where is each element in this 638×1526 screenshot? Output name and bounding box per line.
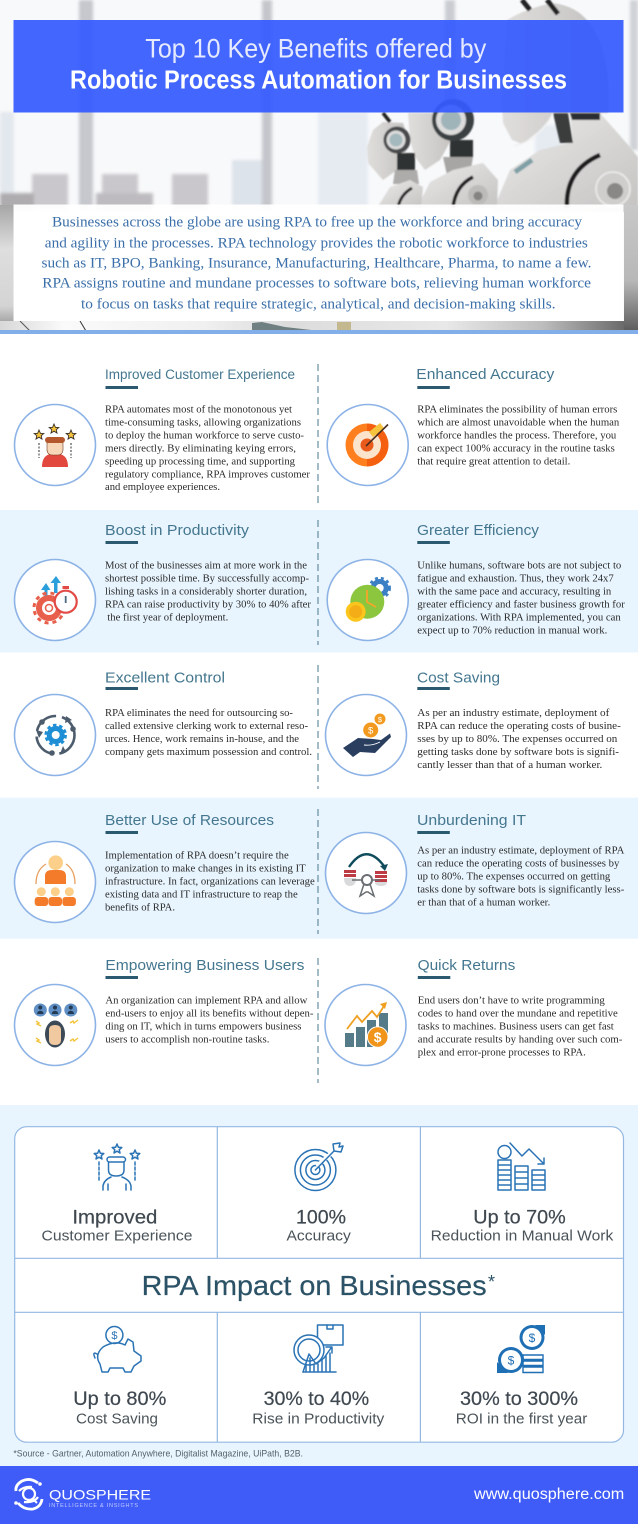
stat: productivity: Rise in Productivity [252, 1410, 385, 1427]
stat: ROI: 30% to 300% [460, 1389, 578, 1410]
benefit: Unburdening IT: up to 80%. The expenses occurred on getting [417, 872, 610, 883]
benefit: Greater Efficiency: expect up to 70% reduction in manual work. [417, 626, 607, 637]
benefit: Boost in Productivity: shortest possible time. By successfully accomp- [105, 574, 310, 585]
icon: coins stack [497, 1325, 545, 1373]
icon: clock, gear and coin [327, 560, 408, 640]
benefit: Boost in Productivity [14, 522, 312, 640]
intro panel: and agility in the processes. RPA technology provides the robotic workforce to industries [45, 235, 588, 251]
benefit: Greater Efficiency: with the same pace and accuracy, resulting in [417, 587, 612, 598]
benefit: Unburdening IT: As per an industry estimate, deployment of RPA [417, 846, 625, 857]
hero photo: office window and robots [0, 0, 638, 331]
icon: target [327, 404, 408, 486]
benefit: Greater Efficiency: organizations. With RPA implemented, you can [417, 613, 622, 624]
icon: hand with coins: $ [368, 726, 374, 736]
logo: Quosphere: QUOSPHERE [49, 1486, 151, 1502]
icon: rising bars and coin [325, 984, 406, 1066]
benefit: Empowering Business Users: ding on IT, which in turns empowers business [105, 1021, 301, 1032]
benefit: Improved Customer Experience: and employee experiences. [105, 482, 220, 493]
icon: person with stars [14, 404, 96, 486]
benefit: Cost Saving: RPA can reduce the operating costs of busine- [417, 721, 621, 732]
benefit: Excellent Control: called extensive clerking work to external reso- [105, 721, 309, 732]
benefit: Greater Efficiency: fatigue and exhaustion. Thus, they work 24x7 [417, 574, 614, 585]
benefit: Quick Returns: End users don’t have to write programming [418, 995, 605, 1006]
stat: cost saving [73, 1326, 166, 1427]
benefit: Cost Saving: sses by up to 80%. The expenses occurred on [417, 734, 618, 745]
icon: hand with coins [326, 694, 406, 776]
stat: ROI [456, 1325, 587, 1427]
stat: manual work reduction: Reduction in Manual Work [431, 1228, 614, 1245]
title line 1: Top 10 Key Benefits offered by [145, 34, 487, 64]
icon: coin stacks with falling arrow [498, 1143, 545, 1190]
stat: manual work reduction [431, 1143, 614, 1245]
benefit: Enhanced Accuracy: which are almost unavoidable when the human [417, 418, 620, 429]
benefit: Quick Returns: codes to hand over the mundane and repetitive [418, 1008, 618, 1019]
benefit: Empowering Business Users [14, 957, 314, 1066]
icon: coins stack: $ [508, 1354, 515, 1368]
benefit: Unburdening IT: tasks done by software bots is significantly less- [417, 885, 625, 896]
benefit: Boost in Productivity: the first year of deployment. [107, 613, 228, 624]
small robot [367, 122, 410, 180]
icon: team with manager [14, 842, 96, 922]
title banner [14, 20, 624, 112]
big robot head and body [502, 3, 609, 144]
icon: target outline [295, 1143, 343, 1190]
benefit: Improved Customer Experience: to deploy the human workforce to serve custo- [105, 431, 305, 442]
benefit: Cost Saving: As per an industry estimate, deployment of [417, 708, 610, 719]
stat: accuracy [286, 1143, 351, 1245]
benefit: Enhanced Accuracy [327, 366, 620, 486]
benefit: Quick Returns: tasks to machines. Business users can get fast [418, 1021, 614, 1032]
benefit: Greater Efficiency: Unlike humans, software bots are not subject to [417, 561, 621, 572]
benefit: Improved Customer Experience: RPA automates most of the monotonous yet [105, 405, 292, 416]
intro panel: Businesses across the globe are using RPA to free up the workforce and bring accuracy [52, 215, 583, 231]
benefit: Quick Returns: plex and error-prone processes to RPA. [418, 1047, 586, 1058]
heading: RPA Impact on Businesses: * [488, 1272, 495, 1292]
benefit: Cost Saving: cantly lesser than that of a human worker. [417, 760, 602, 771]
stat: productivity: 30% to 40% [264, 1389, 369, 1410]
benefit: Empowering Business Users: An organization can implement RPA and allow [105, 995, 308, 1006]
title line 2: Robotic Process Automation for Businesses [70, 66, 567, 94]
heading: RPA Impact on Businesses: RPA Impact on Businesses [142, 1270, 487, 1301]
stat: cost saving: Cost Saving [76, 1410, 158, 1427]
footer [0, 1466, 638, 1524]
source note: *Source - Gartner, Automation Anywhere, Digitalist Magazine, UiPath, B2B. [13, 1449, 303, 1460]
benefit: Boost in Productivity: RPA can raise productivity by 30% to 40% after [105, 600, 312, 611]
icon: piggy bank: $ [111, 1330, 117, 1342]
intro panel: such as IT, BPO, Banking, Insurance, Manufacturing, Healthcare, Pharma, to name a few. [42, 256, 592, 272]
icon: gear, stopwatch and arrows [14, 560, 96, 640]
benefit: Improved Customer Experience: time-consuming tasks, allowing organizations [105, 418, 301, 429]
stat: manual work reduction: Up to 70% [473, 1207, 566, 1228]
benefit: Empowering Business Users: users to accomplish non-routine tasks. [105, 1034, 269, 1045]
benefit: Greater Efficiency: Greater Efficiency [417, 522, 539, 539]
stat: improved customer experience: Improved [72, 1207, 157, 1228]
benefit: Improved Customer Experience: Improved Customer Experience [105, 367, 295, 382]
stat: improved customer experience: Customer Experience [42, 1228, 192, 1245]
icon: users and hand [14, 984, 96, 1066]
benefit: Better Use of Resources: Better Use of Resources [105, 812, 274, 829]
benefit: Empowering Business Users: end-users to enjoy all its benefits without depen- [105, 1008, 314, 1019]
benefit: Boost in Productivity: Boost in Productivity [105, 522, 250, 539]
website address: www.quosphere.com [473, 1486, 624, 1503]
benefit: Unburdening IT: can reduce the operating costs of businesses by [417, 859, 620, 870]
benefit: Unburdening IT [326, 812, 625, 914]
benefit: Improved Customer Experience: speeding up processing time, and supporting [105, 457, 295, 468]
icon: gauge, box and chart [294, 1325, 343, 1372]
benefit: Better Use of Resources: Implementation of RPA doesn’t require the [105, 851, 289, 862]
benefit: Better Use of Resources: infrastructure. In fact, organizations can leverage [105, 877, 315, 888]
benefit: Enhanced Accuracy: workforce handles the process. Therefore, you [417, 431, 617, 442]
benefit: Boost in Productivity: Most of the businesses aim at more work in the [105, 561, 307, 572]
logo: Quosphere: INTELLIGENCE & INSIGHTS [49, 1503, 138, 1509]
middle robot [408, 113, 458, 170]
logo: Quosphere [14, 1479, 151, 1509]
benefit: Better Use of Resources [14, 812, 315, 922]
benefit: Quick Returns: and accurate results by handing over such com- [418, 1034, 623, 1045]
benefit: Enhanced Accuracy: RPA eliminates the possibility of human errors [417, 405, 617, 416]
icon: rising bars and coin: $ [374, 1029, 382, 1045]
benefit: Greater Efficiency [327, 522, 625, 640]
benefit: Enhanced Accuracy: Enhanced Accuracy [416, 366, 555, 383]
benefit: Excellent Control [14, 669, 312, 776]
benefit: Improved Customer Experience [14, 367, 311, 493]
benefit: Excellent Control: Excellent Control [105, 669, 225, 686]
stat: accuracy: 100% [296, 1207, 346, 1228]
icon: workload transfer [326, 832, 406, 914]
benefit: Improved Customer Experience: regulatory compliance, RPA improves customer [105, 470, 311, 481]
benefit: Excellent Control: RPA eliminates the need for outsourcing so- [105, 708, 294, 719]
benefit: Excellent Control: urces. Hence, work remains in-house, and the [105, 734, 299, 745]
benefit: Empowering Business Users: Empowering Business Users [105, 957, 304, 974]
intro panel: to focus on tasks that require strategic, analytical, and decision-making skills. [81, 296, 556, 312]
stat: improved customer experience [42, 1144, 192, 1245]
icon: hand with coins: $ [378, 715, 383, 724]
panel: RPA impact on businesses [15, 1127, 623, 1442]
benefit: Unburdening IT: Unburdening IT [417, 812, 526, 829]
benefit: Enhanced Accuracy: can expect 100% accuracy in the routine tasks [417, 444, 615, 455]
benefit: Better Use of Resources: benefits of RPA. [105, 903, 175, 914]
intro panel: RPA assigns routine and mundane processes to software bots, relieving human workforce [42, 276, 591, 292]
stat: cost saving: Up to 80% [73, 1389, 166, 1410]
benefit: Better Use of Resources: existing data and IT infrastructure to reap the [105, 890, 298, 901]
benefit: Enhanced Accuracy: that require great attention to detail. [417, 457, 570, 468]
benefit: Better Use of Resources: organization to make changes in its existing IT [105, 864, 306, 875]
benefit: Quick Returns [325, 957, 623, 1066]
intro panel [14, 204, 624, 321]
benefit: Quick Returns: Quick Returns [418, 957, 515, 974]
stat: productivity [252, 1325, 385, 1427]
icon: coins stack: $ [529, 1331, 536, 1345]
stat: accuracy: Accuracy [286, 1228, 351, 1245]
benefit: Improved Customer Experience: mers directly. By eliminating keying errors, [105, 444, 296, 455]
benefit: Cost Saving: getting tasks done by software bots is signifi- [417, 747, 620, 758]
benefit: Unburdening IT: er than that of a human worker. [417, 898, 550, 909]
benefit: Excellent Control: company gets maximum possession and control. [105, 747, 312, 758]
stat: ROI: ROI in the first year [456, 1410, 587, 1427]
icon: gear with cycle arrows [14, 694, 96, 776]
benefit: Cost Saving [326, 669, 621, 776]
benefit: Cost Saving: Cost Saving [417, 669, 500, 686]
icon: customer outline [94, 1144, 140, 1190]
benefit: Greater Efficiency: greater efficiency and faster business growth for [417, 600, 625, 611]
benefit: Boost in Productivity: lishing tasks in a considerably shorter duration, [105, 587, 307, 598]
